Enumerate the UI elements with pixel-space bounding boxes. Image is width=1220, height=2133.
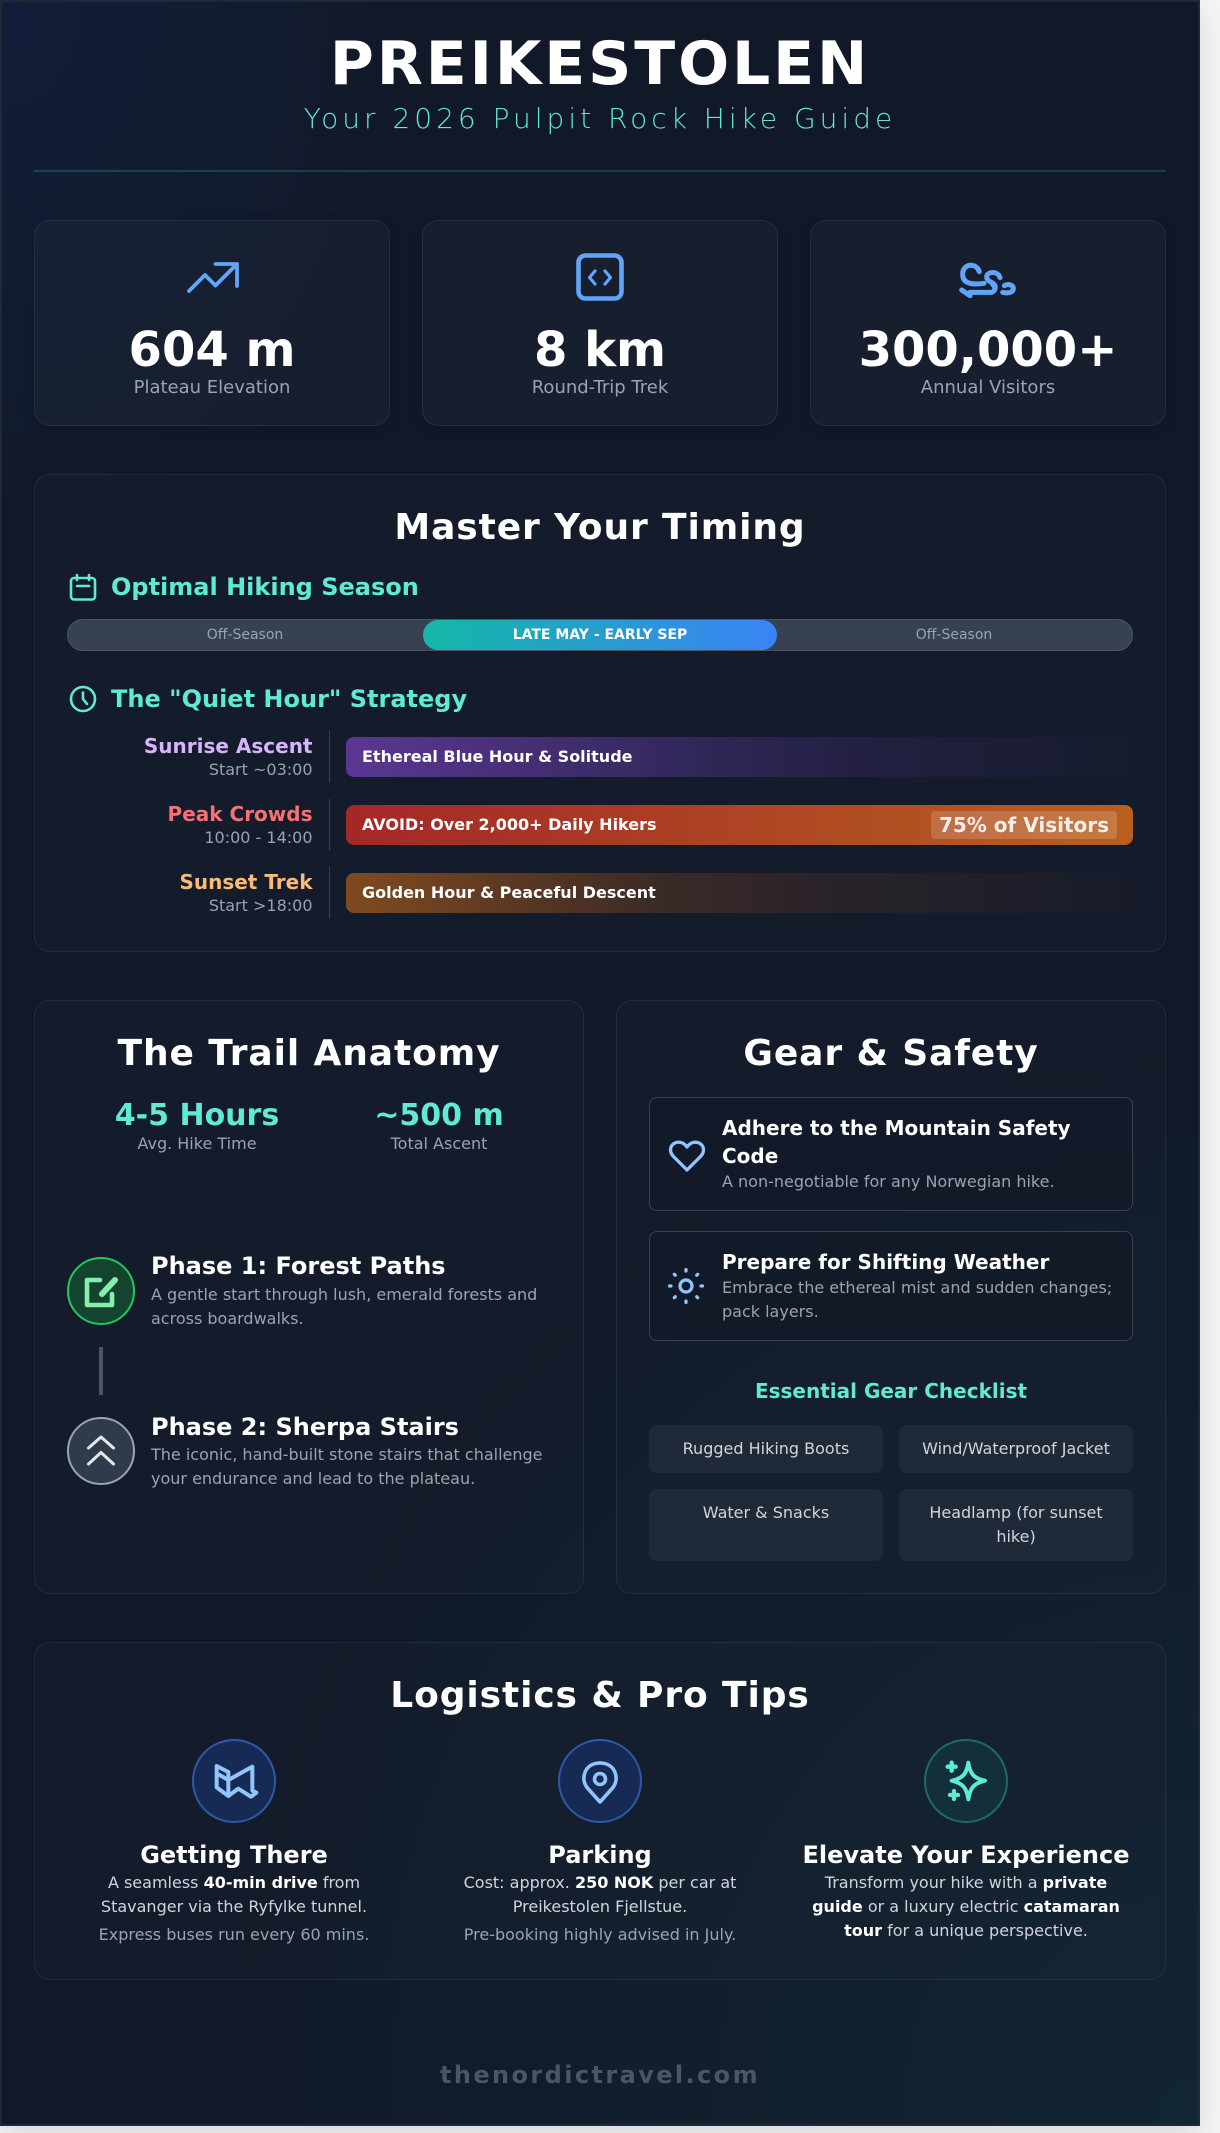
stat label: time: Avg. Hike Time xyxy=(137,1134,257,1153)
label: Plateau Elevation xyxy=(134,377,290,398)
label: sunrise: Sunrise Ascent xyxy=(144,734,312,758)
icon: trending up xyxy=(187,262,239,293)
note: buses: Express buses run every 60 mins. xyxy=(99,1925,369,1944)
bar: sunset: Golden Hour & Peaceful Descent xyxy=(362,883,656,902)
safety title 2: Prepare for Shifting Weather xyxy=(722,1250,1049,1274)
phase 2 title: Phase 2: Sherpa Stairs xyxy=(151,1413,459,1441)
icon: sparkles xyxy=(924,1739,1008,1823)
callout: 75 percent: 75% of Visitors xyxy=(939,813,1109,837)
item: jacket: Wind/Waterproof Jacket xyxy=(922,1439,1110,1458)
phase 1 title: Phase 1: Forest Paths xyxy=(151,1252,446,1280)
item: water: Water & Snacks xyxy=(703,1503,829,1522)
stat: time: 4-5 Hours xyxy=(115,1098,279,1133)
icon: wind swirl xyxy=(959,262,1016,298)
phase 1 text xyxy=(151,1285,537,1328)
stat card: visitors xyxy=(810,220,1166,426)
bar: sunset xyxy=(346,873,1133,913)
icon: code square xyxy=(576,253,624,301)
bar: sunrise xyxy=(346,737,1133,777)
item: boots xyxy=(649,1425,883,1473)
safety text 2: Embrace the ethereal mist and sudden changes; xyxy=(722,1278,1112,1297)
stat: ascent: ~500 m xyxy=(374,1098,504,1133)
icon: phase 1 pencil xyxy=(67,1257,135,1325)
bar: peak xyxy=(346,805,1133,845)
value: 300,000+ xyxy=(859,322,1117,378)
bar: sunrise: Ethereal Blue Hour & Solitude xyxy=(362,747,632,766)
column text: elevate: Transform your hike with a private xyxy=(825,1873,1107,1892)
off-season right: Off-Season xyxy=(916,627,992,643)
heading: optimal season: Optimal Hiking Season xyxy=(111,573,419,601)
phase 1 text: A gentle start through lush, emerald forests and xyxy=(151,1285,537,1304)
value: 8 km xyxy=(534,322,666,378)
icon: calendar xyxy=(70,574,96,601)
heading: quiet hour: The "Quiet Hour" Strategy xyxy=(111,685,467,713)
column text: parking: Cost: approx. 250 NOK per car at xyxy=(464,1873,736,1892)
stat card: distance xyxy=(422,220,778,426)
column text: parking xyxy=(464,1873,736,1916)
panel: gear and safety xyxy=(616,1000,1166,1594)
column text: elevate: guide or a luxury electric catamaran xyxy=(812,1897,1120,1916)
stat card: elevation xyxy=(34,220,390,426)
time: sunrise: Start ~03:00 xyxy=(209,760,312,779)
row: peak xyxy=(168,802,312,847)
column text: elevate: tour for a unique perspective. xyxy=(844,1921,1088,1940)
item: boots: Rugged Hiking Boots xyxy=(683,1439,849,1458)
safety box 2 xyxy=(649,1231,1133,1341)
safety text 2 xyxy=(722,1278,1112,1321)
item: headlamp: Headlamp (for sunset hike) xyxy=(929,1503,1103,1546)
item: headlamp xyxy=(899,1489,1133,1561)
title: PREIKESTOLEN xyxy=(330,29,870,99)
icon: phase 2 chevrons xyxy=(67,1417,135,1485)
phase 2 text: your endurance and lead to the plateau. xyxy=(151,1469,475,1488)
column text: getting there: A seamless 40-min drive from xyxy=(108,1873,360,1892)
icon: heart xyxy=(668,1140,706,1172)
column heading: elevate: Elevate Your Experience xyxy=(802,1841,1130,1869)
subtitle: Your 2026 Pulpit Rock Hike Guide xyxy=(304,102,896,135)
label: Annual Visitors xyxy=(921,377,1055,398)
season label: LATE MAY - EARLY SEP xyxy=(513,627,687,643)
panel: master your timing xyxy=(34,474,1166,952)
stat label: ascent: Total Ascent xyxy=(391,1134,487,1153)
safety text 2: pack layers. xyxy=(722,1302,819,1321)
heading: gear: Gear & Safety xyxy=(743,1033,1039,1074)
label: Round-Trip Trek xyxy=(532,377,668,398)
phase 1 text: across boardwalks. xyxy=(151,1309,304,1328)
heading: logistics: Logistics & Pro Tips xyxy=(390,1675,810,1716)
safety title 1: Adhere to the Mountain Safety xyxy=(722,1116,1071,1140)
row: sunrise xyxy=(144,734,312,779)
icon: clock xyxy=(70,686,96,712)
column text: elevate xyxy=(812,1873,1120,1940)
bar: peak: AVOID: Over 2,000+ Daily Hikers xyxy=(362,815,657,834)
column text: parking: Preikestolen Fjellstue. xyxy=(513,1897,687,1916)
item: water xyxy=(649,1489,883,1561)
safety title 1 xyxy=(722,1116,1071,1168)
column text: getting there: Stavanger via the Ryfylke tunnel. xyxy=(101,1897,367,1916)
off-season left: Off-Season xyxy=(207,627,283,643)
panel: trail anatomy xyxy=(34,1000,584,1594)
column heading: parking: Parking xyxy=(548,1841,652,1869)
label: sunset: Sunset Trek xyxy=(179,870,312,894)
heading: trail: The Trail Anatomy xyxy=(118,1033,500,1074)
icon: map xyxy=(192,1739,276,1823)
note: booking: Pre-booking highly advised in July. xyxy=(464,1925,736,1944)
time: peak: 10:00 - 14:00 xyxy=(204,828,312,847)
safety title 1: Code xyxy=(722,1144,778,1168)
time: sunset: Start >18:00 xyxy=(209,896,312,915)
column text: getting there xyxy=(101,1873,367,1916)
row: sunset xyxy=(179,870,313,915)
label: peak: Peak Crowds xyxy=(168,802,312,826)
safety text 1: A non-negotiable for any Norwegian hike. xyxy=(722,1172,1055,1191)
value: 604 m xyxy=(129,322,295,378)
icon: sun xyxy=(668,1268,704,1304)
item: jacket xyxy=(899,1425,1133,1473)
season highlight xyxy=(423,620,777,650)
phase 2 text: The iconic, hand-built stone stairs that challenge xyxy=(151,1445,543,1464)
column heading: getting there: Getting There xyxy=(140,1841,328,1869)
footer: thenordictravel.com xyxy=(440,2061,760,2089)
icon: pin xyxy=(558,1739,642,1823)
safety box 1 xyxy=(649,1097,1133,1211)
heading: timing: Master Your Timing xyxy=(394,507,806,548)
header divider xyxy=(34,170,1166,172)
panel: logistics xyxy=(34,1642,1166,1980)
season bar xyxy=(67,619,1133,651)
connector xyxy=(99,1347,103,1395)
heading: checklist: Essential Gear Checklist xyxy=(755,1379,1027,1403)
phase 2 text xyxy=(150,1445,543,1488)
